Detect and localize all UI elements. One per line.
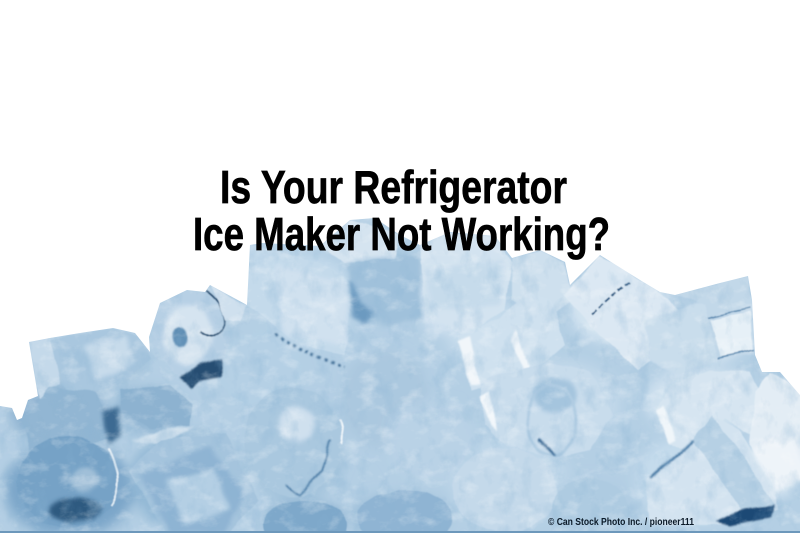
cube: cylinder centre right — [480, 363, 612, 458]
cube: round dark swirl — [162, 286, 246, 390]
cube: left middle — [22, 385, 195, 455]
ice cube pile photo — [0, 200, 800, 533]
cube: glass ring centre — [260, 388, 344, 498]
cube: lower centre — [262, 486, 557, 531]
base shadow strip — [0, 531, 800, 533]
photo credit: © Can Stock Photo Inc. / pioneer111 — [548, 517, 694, 528]
title line 2: Ice Maker Not Working? — [193, 208, 610, 260]
ice highlight texture — [0, 215, 800, 533]
page canvas — [0, 169, 800, 533]
cube: top right cluster — [565, 255, 755, 375]
cube: top centre right — [420, 232, 572, 335]
cube: bright mid — [457, 303, 565, 390]
cube: top centre tall — [246, 220, 422, 368]
cube: far left — [29, 328, 152, 398]
cube: front right tilted — [645, 415, 778, 526]
title — [193, 161, 610, 260]
title line 1: Is Your Refrigerator — [220, 161, 567, 213]
soft tonal regions — [5, 250, 800, 533]
cube: bottom-left round — [18, 436, 118, 528]
cube: bottom centre-left square — [130, 432, 258, 533]
cube: far right — [750, 372, 800, 490]
ice shadow texture — [0, 215, 800, 533]
cube: right rounded — [656, 370, 765, 450]
